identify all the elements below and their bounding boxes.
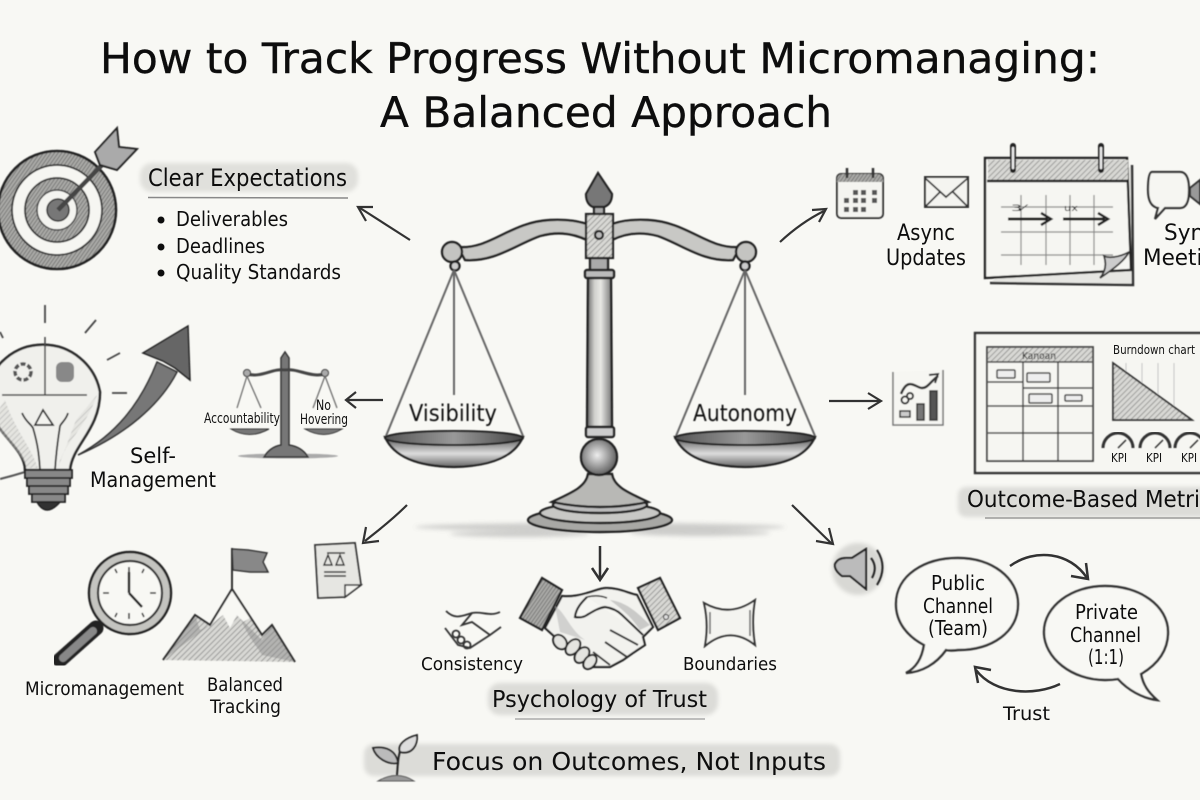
icon: large calendar: 3⁄ [1011, 204, 1030, 214]
icon: policy document [315, 543, 361, 598]
right pan: autonomy: Autonomy [693, 401, 797, 427]
left pan: visibility: Visibility [409, 401, 497, 427]
icon: small calendar [837, 168, 883, 218]
small scale: accountability vs no hovering [204, 352, 348, 458]
bubble: private channel: Private [1075, 600, 1138, 624]
arrow: to outcome metrics [829, 393, 881, 409]
arrow: upward growth [78, 326, 190, 455]
icon: target with arrow [0, 128, 137, 269]
bullet list [158, 207, 341, 284]
scale base [528, 474, 672, 532]
icon: speaker [832, 543, 884, 595]
footer text: Focus on Outcomes, Not Inputs [432, 747, 826, 776]
scale shadow [415, 523, 785, 537]
icon: large calendar [985, 146, 1133, 285]
label: self-management: Self- [130, 444, 176, 468]
small scale: accountability vs no hovering: Accountability [204, 411, 280, 427]
arrow: to async updates [780, 209, 826, 242]
arrow: to clear expectations [358, 207, 410, 240]
label: balanced tracking: Balanced [207, 674, 283, 696]
bullet list: Quality Standards [176, 260, 341, 284]
highlight band [364, 744, 840, 776]
scale finial and pivot [586, 173, 613, 258]
scale column [581, 258, 617, 475]
bullet list: Deadlines [176, 234, 265, 258]
icon: large handshake [520, 578, 680, 672]
central balance scale [385, 173, 815, 537]
bullet list: Deliverables [176, 207, 288, 231]
bubble: private channel [1044, 586, 1168, 700]
kpi gauges: KPI [1146, 451, 1162, 465]
arrow: to handshake [592, 546, 608, 580]
right pan: autonomy [675, 270, 815, 467]
arrow: to document [363, 505, 407, 543]
bubble: public channel [896, 558, 1018, 673]
bubble: private channel: Channel [1070, 623, 1141, 647]
title: How to Track Progress Without Micromanaging: [100, 34, 1100, 83]
left pan: visibility [385, 270, 523, 467]
label: async updates [886, 221, 966, 271]
icon: light bulb [0, 305, 127, 510]
heading: psychology of trust [488, 683, 718, 719]
icon: small handshake [445, 611, 501, 648]
bubble: public channel: Channel [923, 594, 993, 618]
icon: large calendar: ux [1064, 204, 1079, 214]
icon: envelope [925, 177, 968, 207]
small scale: accountability vs no hovering: No [316, 398, 331, 414]
label: balanced tracking [207, 674, 283, 718]
label: async updates: Async [897, 221, 955, 246]
kpi gauges: KPI [1111, 451, 1127, 465]
arrow: to speaker [792, 505, 833, 544]
label: consistency: Consistency [421, 654, 523, 675]
label: async updates: Updates [886, 246, 966, 271]
icon: sprout [373, 735, 417, 781]
kanban board [987, 347, 1093, 461]
kanban board: Kanoan [1022, 351, 1056, 362]
icon: video chat bubble [1148, 172, 1200, 219]
highlight band [140, 163, 358, 192]
label: balanced tracking: Tracking [209, 696, 281, 718]
arrow: to small scale [346, 392, 383, 408]
panel: outcome dashboard [975, 333, 1200, 473]
scale beam [442, 220, 756, 270]
burndown chart [1113, 343, 1195, 420]
icon: boundaries [704, 600, 755, 646]
kpi gauges: KPI [1181, 451, 1197, 465]
heading: clear expectations: Clear Expectations [148, 164, 347, 192]
bubble: public channel: (Team) [928, 616, 988, 640]
small scale: accountability vs no hovering: Hovering [300, 412, 348, 428]
title: A Balanced Approach [380, 88, 832, 137]
kpi gauges [1103, 433, 1200, 465]
label: self-management [90, 444, 216, 492]
label: boundaries: Boundaries [683, 654, 777, 675]
bubble: public channel: Public [931, 571, 985, 595]
arrow: public to private [1010, 555, 1088, 579]
icon: magnifier with clock [60, 552, 171, 660]
panel: clear expectations [140, 163, 358, 284]
icon: chart [893, 370, 943, 425]
label: sync meetings [1143, 221, 1200, 271]
label: micromanagement: Micromanagement [25, 678, 184, 700]
icon: mountain with flag [163, 548, 295, 662]
heading: psychology of trust: Psychology of Trust [492, 687, 707, 713]
title [100, 34, 1100, 137]
bubble: private channel: (1:1) [1088, 645, 1124, 669]
footer banner: focus on outcomes [364, 735, 840, 781]
arrow: private to public [975, 667, 1060, 691]
label: self-management: Management [90, 468, 216, 492]
label: trust: Trust [1002, 703, 1050, 725]
